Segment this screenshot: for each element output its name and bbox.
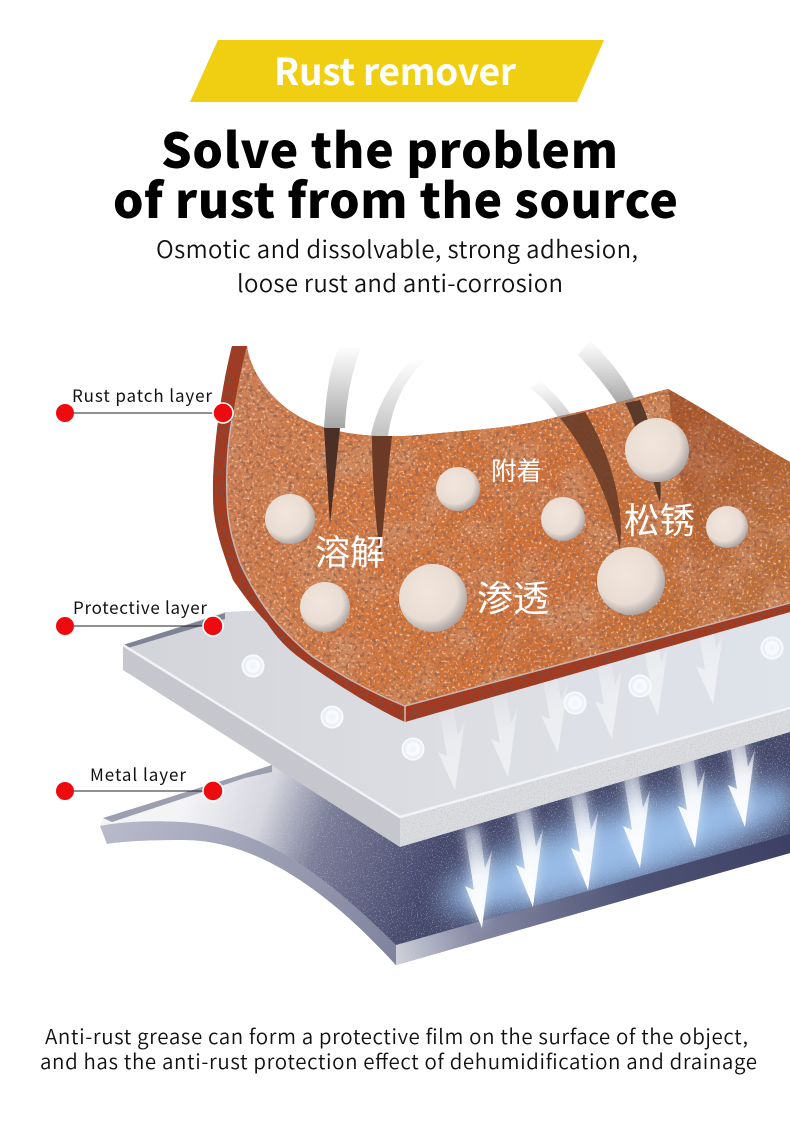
label: loosen rust: 松锈: [624, 493, 695, 544]
title: [113, 112, 678, 232]
banner: Rust remover: [190, 40, 604, 102]
layered diagram: [100, 340, 790, 965]
protective layer arrows: [437, 612, 723, 790]
label: penetration: 渗透: [477, 570, 549, 622]
title: Solve the problem: [161, 112, 618, 182]
callout: protective layer: [56, 594, 223, 636]
protective layer: [123, 585, 790, 847]
subtitle: loose rust and anti-corrosion: [237, 264, 563, 299]
footer text: Anti-rust grease can form a protective film on the surface of the object,: [45, 1020, 748, 1050]
banner: Rust remover: Rust remover: [274, 42, 517, 96]
protective layer droplets: [242, 636, 784, 760]
label: adhesion: 附着: [491, 451, 542, 488]
rust patch layer: [213, 340, 790, 722]
title: of rust from the source: [113, 162, 678, 232]
callout: protective layer: Protective layer: [73, 594, 207, 619]
callout: rust patch layer: Rust patch layer: [72, 382, 212, 407]
footer text: and has the anti-rust protection effect of dehumidification and drainage: [40, 1045, 757, 1075]
metal layer: [100, 732, 790, 965]
label: dissolve: 溶解: [315, 525, 385, 576]
footer text: [40, 1020, 757, 1075]
metal layer arrows: [464, 725, 755, 928]
subtitle: [156, 230, 638, 299]
penetration shadow streaks: [324, 340, 661, 560]
callout: metal layer: [56, 761, 223, 801]
subtitle: Osmotic and dissolvable, strong adhesion,: [156, 230, 638, 265]
callout: metal layer: Metal layer: [90, 761, 186, 786]
callout: rust patch layer: [56, 382, 233, 423]
rust particles: [265, 418, 748, 632]
